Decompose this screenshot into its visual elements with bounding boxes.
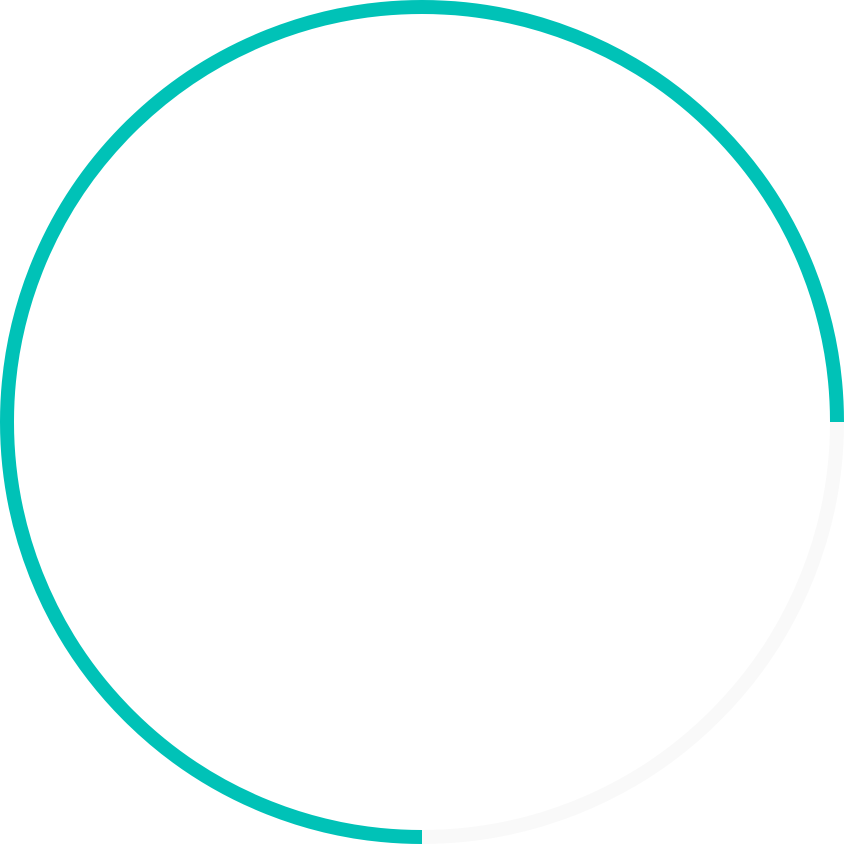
track: remaining quarter ring [422, 422, 837, 837]
